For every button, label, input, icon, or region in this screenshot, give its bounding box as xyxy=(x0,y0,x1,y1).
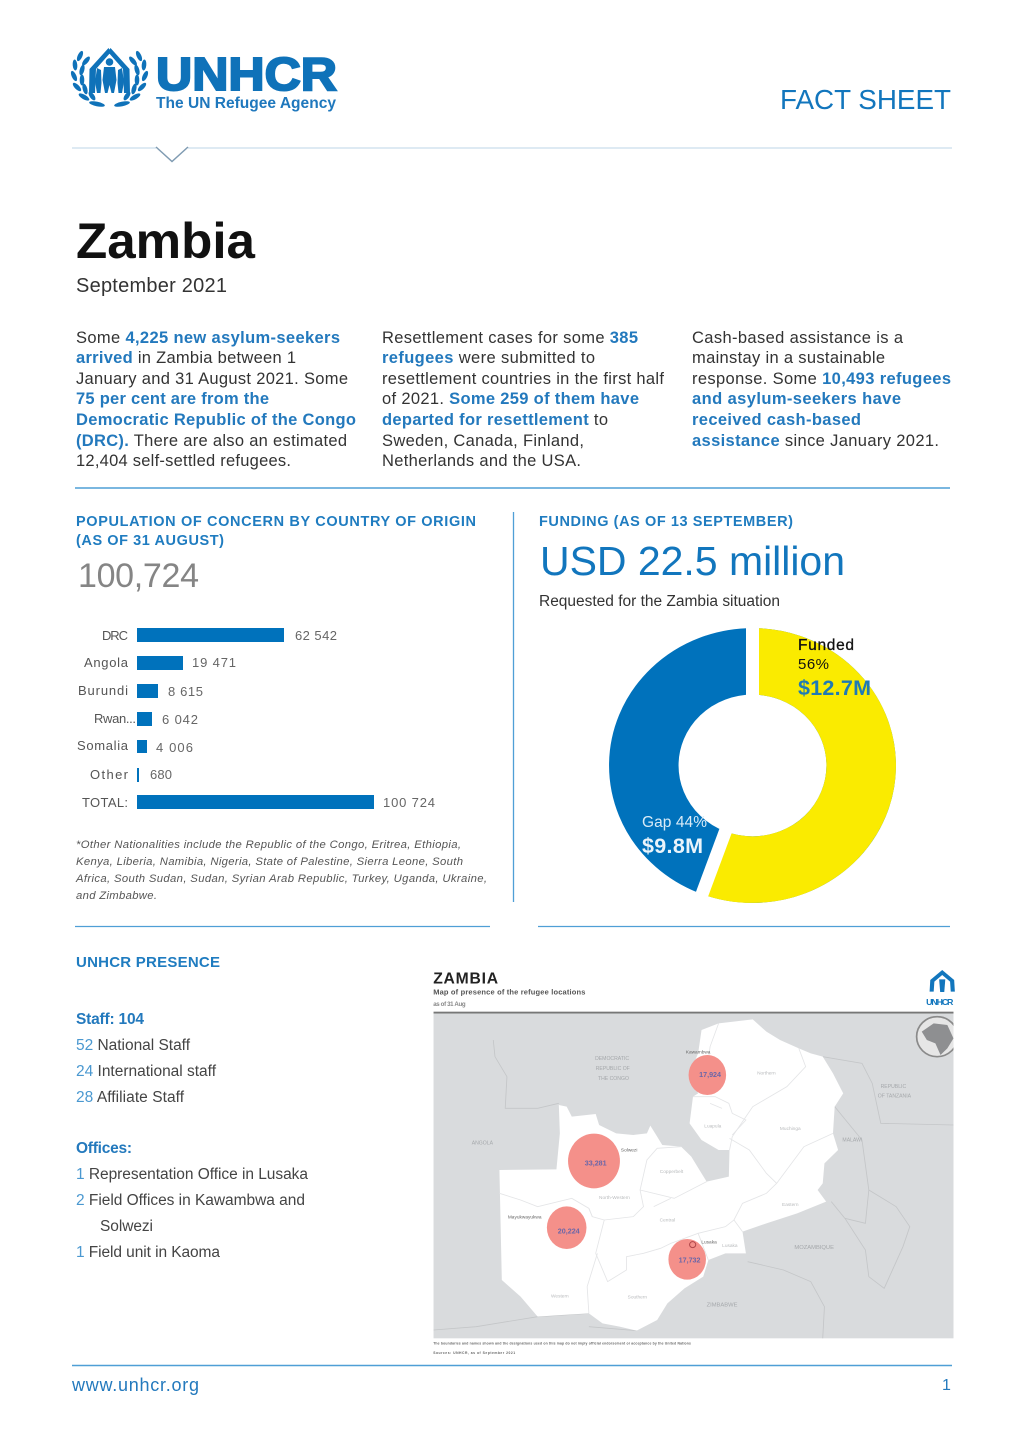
fact sheet label: FACT SHEET xyxy=(780,84,951,115)
map labels: Eastern xyxy=(782,1202,799,1208)
bar chart: Angola xyxy=(84,655,129,670)
bar chart: 62 542 xyxy=(295,628,337,643)
offices list: 1 Representation Office in Lusaka xyxy=(76,1166,308,1183)
staff list: 28 Affiliate Staff xyxy=(76,1089,185,1106)
text block: resettlement: Resettlement cases for some 385 xyxy=(382,329,638,347)
chart footnote xyxy=(75,839,487,902)
text block: resettlement: Sweden, Canada, Finland, xyxy=(382,432,584,450)
chart footnote: and Zimbabwe. xyxy=(76,890,157,902)
text block: cash-based assistance xyxy=(692,329,951,450)
population heading: POPULATION OF CONCERN BY COUNTRY OF ORIGIN xyxy=(76,514,476,530)
bar chart: DRC xyxy=(102,628,128,643)
bar chart: 100 724 xyxy=(383,795,435,810)
Zambia outline xyxy=(499,1019,843,1331)
bar chart: 4 006 xyxy=(156,740,193,755)
bubble values: Kawambwa xyxy=(686,1050,711,1056)
map bubbles xyxy=(547,1055,726,1280)
chart footnote: *Other Nationalities include the Republic of the Congo, Eritrea, Ethiopia, xyxy=(76,839,461,851)
text block: new arrivals: arrived in Zambia between 1 xyxy=(76,349,296,367)
chevron xyxy=(156,147,188,162)
panel: funding xyxy=(539,514,871,905)
offices list: 1 Field unit in Kaoma xyxy=(76,1244,220,1261)
header rule with chevron xyxy=(72,147,952,149)
bubble values xyxy=(508,1050,721,1265)
bubble values: Lusaka xyxy=(701,1239,717,1245)
bar chart: 8 615 xyxy=(168,684,203,699)
text block: cash-based assistance: Cash-based assistance is a xyxy=(692,329,904,347)
neighbouring borders xyxy=(434,1040,953,1338)
gap label: Gap 44% xyxy=(642,814,707,831)
map title xyxy=(433,970,585,1008)
text block: cash-based assistance: assistance since January 2021. xyxy=(692,432,939,450)
map labels: North-Western xyxy=(599,1195,630,1201)
map logo xyxy=(926,970,955,1007)
map labels: Muchinga xyxy=(780,1126,801,1132)
map labels: THE CONGO xyxy=(598,1076,629,1082)
funding heading: FUNDING (AS OF 13 SEPTEMBER) xyxy=(539,514,793,530)
offices list: 2 Field Offices in Kawambwa and xyxy=(76,1192,305,1209)
text block: resettlement: of 2021. Some 259 of them have xyxy=(382,390,639,408)
gap label xyxy=(642,814,707,858)
date: September 2021 xyxy=(76,275,227,297)
footer xyxy=(71,1366,952,1395)
bubble values: 17,732 xyxy=(679,1257,701,1265)
divider xyxy=(75,487,950,489)
text block: new arrivals xyxy=(76,329,356,470)
text block: new arrivals: Democratic Republic of the Congo xyxy=(76,411,356,429)
text block: new arrivals: 75 per cent are from the xyxy=(76,390,269,408)
map labels: MALAWI xyxy=(842,1137,862,1143)
map labels: ANGOLA xyxy=(472,1140,494,1146)
funded label xyxy=(798,637,871,700)
chart footnote: Africa, South Sudan, Sudan, Syrian Arab Republic, Turkey, Uganda, Ukraine, xyxy=(75,873,487,885)
population heading xyxy=(76,514,476,549)
bar chart: 6 042 xyxy=(162,712,198,727)
map labels: Lusaka xyxy=(722,1243,738,1249)
bubble values: Mayukwayukwa xyxy=(508,1215,542,1221)
chart footnote: Kenya, Liberia, Namibia, Nigeria, State of Palestine, Sierra Leone, South xyxy=(76,856,463,868)
text block: resettlement: departed for resettlement to xyxy=(382,411,608,429)
map disclaimer: Sources: UNHCR, as of September 2021 xyxy=(433,1351,515,1355)
staff list xyxy=(76,1011,217,1106)
map labels: Southern xyxy=(628,1294,647,1300)
map logo: UNHCR xyxy=(926,997,954,1007)
text block: resettlement xyxy=(382,329,664,470)
map labels: REPUBLIC xyxy=(881,1084,907,1090)
map labels: Central xyxy=(660,1217,675,1223)
map title: ZAMBIA xyxy=(433,970,498,987)
funded label: 56% xyxy=(798,656,829,673)
bar chart: TOTAL: xyxy=(82,795,128,810)
divider xyxy=(75,926,950,928)
offices list xyxy=(76,1140,308,1261)
staff list: 24 International staff xyxy=(76,1063,217,1080)
map background xyxy=(434,1014,953,1338)
map disclaimer xyxy=(433,1341,691,1355)
map labels: Western xyxy=(551,1294,569,1300)
funded label: Funded xyxy=(798,637,854,654)
text block: new arrivals: (DRC). There are also an estimated xyxy=(76,432,347,450)
logo: UNHCR xyxy=(70,48,337,112)
map panel xyxy=(433,970,958,1355)
map labels: DEMOCRATIC xyxy=(595,1056,629,1062)
bar chart: Rwan... xyxy=(94,711,136,726)
logo tagline: The UN Refugee Agency xyxy=(156,95,336,112)
funding caption: Requested for the Zambia situation xyxy=(539,593,780,610)
divider xyxy=(512,512,514,902)
map labels xyxy=(472,1056,912,1308)
bar chart: Other xyxy=(90,767,129,782)
bar chart xyxy=(77,628,435,810)
text block: new arrivals: 12,404 self-settled refugees. xyxy=(76,452,291,470)
bar chart: Burundi xyxy=(78,683,128,698)
panel: population of concern xyxy=(75,514,487,902)
bubble values: 33,281 xyxy=(585,1160,607,1168)
map labels: Luapula xyxy=(704,1123,722,1129)
gap label: $9.8M xyxy=(642,834,703,858)
text block: resettlement: Netherlands and the USA. xyxy=(382,452,581,470)
text block: cash-based assistance: response. Some 10,493 refugees xyxy=(692,370,951,388)
bubble values: 17,924 xyxy=(699,1071,721,1079)
icon: UNHCR emblem xyxy=(70,48,149,108)
offices list: Offices: xyxy=(76,1140,132,1157)
text block: resettlement: resettlement countries in the first half xyxy=(382,370,664,388)
map labels: REPUBLIC OF xyxy=(596,1066,630,1072)
province borders xyxy=(499,1023,833,1313)
population heading: (AS OF 31 AUGUST) xyxy=(76,533,224,549)
panel: UNHCR presence xyxy=(76,954,308,1261)
map labels: OF TANZANIA xyxy=(878,1093,912,1099)
staff list: Staff: 104 xyxy=(76,1011,144,1028)
funding amount: USD 22.5 million xyxy=(540,538,845,584)
map labels: MOZAMBIQUE xyxy=(794,1245,834,1251)
text block: cash-based assistance: received cash-based xyxy=(692,411,861,429)
bar chart: 680 xyxy=(150,767,172,782)
map labels: Copperbelt xyxy=(660,1169,684,1175)
text block: resettlement: refugees were submitted to xyxy=(382,349,595,367)
logo wordmark: UNHCR xyxy=(156,48,337,100)
bubble values: Solwezi xyxy=(621,1147,637,1153)
text block: cash-based assistance: and asylum-seekers have xyxy=(692,390,901,408)
offices list: Solwezi xyxy=(100,1218,153,1235)
map labels: ZIMBABWE xyxy=(707,1302,738,1308)
bar chart: Somalia xyxy=(77,738,129,753)
map rule xyxy=(434,1012,953,1014)
text block: cash-based assistance: mainstay in a sustainable xyxy=(692,349,885,367)
funded label: $12.7M xyxy=(798,676,871,700)
page number: 1 xyxy=(942,1377,951,1394)
text block: new arrivals: Some 4,225 new asylum-seekers xyxy=(76,329,340,347)
inset globe xyxy=(917,1017,958,1057)
text block: new arrivals: January and 31 August 2021. Some xyxy=(76,370,348,388)
map title: Map of presence of the refugee locations xyxy=(433,987,585,996)
map title: as of 31 Aug xyxy=(433,1002,466,1008)
map disclaimer: The boundaries and names shown and the designations used on this map do not imply official endorsement or acceptance by the United Nations xyxy=(433,1341,691,1345)
staff list: 52 National Staff xyxy=(76,1037,191,1054)
map labels: Northern xyxy=(757,1071,776,1077)
icon: lusaka marker xyxy=(690,1242,696,1248)
title: Zambia xyxy=(76,213,256,269)
donut chart xyxy=(642,620,871,905)
bubble values: 20,224 xyxy=(558,1227,580,1235)
footer url: www.unhcr.org xyxy=(71,1375,199,1395)
presence heading: UNHCR PRESENCE xyxy=(76,954,220,971)
population total: 100,724 xyxy=(78,557,199,595)
bar chart: 19 471 xyxy=(192,655,236,670)
